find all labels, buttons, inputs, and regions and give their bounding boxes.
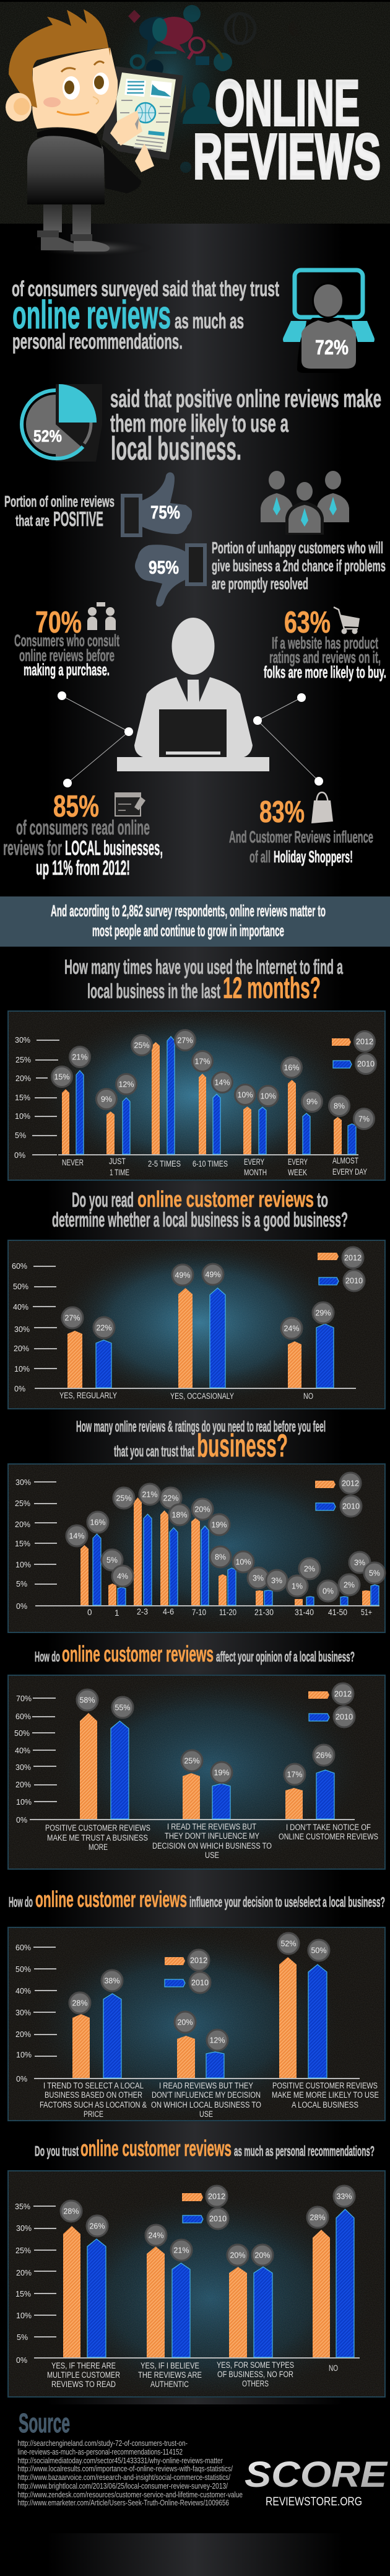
- bars 2010: [76, 1036, 356, 1154]
- logo: score: [245, 2455, 389, 2508]
- value bubbles: 9%: [101, 1095, 112, 1104]
- category labels: EVERY: [288, 1157, 308, 1167]
- axis: 10%: [16, 1798, 32, 1807]
- category labels: NEVER: [62, 1158, 84, 1167]
- category labels: USE: [205, 1851, 219, 1860]
- text: unhappy customers: are promptly resolved: [212, 574, 308, 593]
- category labels: BUSINESS BASED ON OTHER: [45, 2090, 142, 2100]
- axis: 10%: [15, 1112, 30, 1121]
- axis: 10%: [16, 2051, 32, 2059]
- value bubbles: 38%: [104, 1976, 120, 1985]
- axis: [15, 2202, 360, 2365]
- value bubbles: 29%: [315, 1308, 331, 1317]
- axis: 5%: [16, 1580, 27, 1588]
- legend: [308, 1683, 355, 1727]
- axis: 5%: [17, 2333, 28, 2342]
- value bubbles: 20%: [177, 2018, 193, 2027]
- category labels: 0: [87, 1608, 92, 1617]
- category labels: YES, REGULARLY: [59, 1391, 117, 1400]
- heading: chart 3: that you can trust that: [114, 1443, 194, 1460]
- value bubbles: 3%: [354, 1559, 365, 1567]
- axis: 15%: [15, 1540, 30, 1548]
- value bubbles: 8%: [215, 1553, 226, 1561]
- heading: chart 5: online customer reviews: [35, 1886, 187, 1912]
- value bubbles: 17%: [287, 1771, 303, 1779]
- heading: chart 2: Do you read: [72, 1188, 134, 1211]
- value bubbles: 5%: [369, 1569, 380, 1577]
- category labels: DON'T INFLUENCE MY DECISION: [152, 2090, 261, 2100]
- axis: 25%: [15, 2246, 31, 2255]
- header panel: [0, 0, 390, 224]
- value bubbles: 9%: [306, 1098, 318, 1106]
- legend: [315, 1473, 362, 1517]
- value bubbles: 16%: [90, 1518, 106, 1527]
- value bubbles: 18%: [171, 1510, 188, 1519]
- category labels: POSITIVE CUSTOMER REVIEWS: [45, 1823, 150, 1833]
- value bubbles: 50%: [311, 1947, 327, 1955]
- source list: http://www.localresults.com/importance-of-online-reviews-with-faqs-statistics/: [17, 2464, 233, 2473]
- category labels: A LOCAL BUSINESS: [292, 2100, 358, 2109]
- category labels: EVERY: [244, 1157, 264, 1167]
- value bubbles: [77, 1689, 334, 1785]
- value bubbles: 25%: [116, 1494, 132, 1503]
- title: [193, 68, 381, 192]
- category labels: NO: [303, 1391, 313, 1401]
- stat: 70%: online reviews before: [19, 646, 115, 665]
- axis: 0%: [16, 2075, 27, 2083]
- stat: 83%: of all: [249, 848, 271, 866]
- value bubbles: 27%: [64, 1313, 80, 1322]
- value bubbles: 27%: [177, 1036, 193, 1045]
- logo: score: REVIEWSTORE.ORG: [266, 2495, 362, 2508]
- text: positive reviews: [110, 385, 381, 467]
- axis: 0%: [14, 1151, 25, 1160]
- icon: thumbs down 95%: 95%: [149, 558, 179, 578]
- icon: review form: [115, 792, 145, 817]
- value bubbles: 1%: [292, 1582, 303, 1591]
- bars 2012: [72, 1957, 297, 2078]
- category labels: [62, 1156, 367, 1177]
- text: portion positive: POSITIVE: [53, 507, 103, 530]
- category labels: 4-6: [163, 1607, 174, 1616]
- panel: chart 5: [8, 1927, 385, 2125]
- legend: 2010: [342, 1502, 360, 1510]
- category labels: [87, 1607, 372, 1618]
- text: trust online reviews: as much as: [175, 309, 244, 333]
- source list: http://www.brightlocal.com/2013/06/25/local-consumer-review-survey-2013/: [17, 2482, 228, 2491]
- axis: 20%: [16, 2269, 32, 2277]
- value bubbles: 22%: [96, 1323, 112, 1332]
- stat: 85%: [3, 790, 163, 879]
- legend: [182, 2186, 228, 2229]
- axis: 35%: [15, 2202, 30, 2211]
- bars 2012: [80, 1713, 303, 1819]
- text: portion positive: Portion of online reviews: [4, 493, 115, 510]
- axis: 30%: [15, 1763, 31, 1772]
- axis: 10%: [14, 1365, 30, 1373]
- value bubbles: 19%: [214, 1768, 230, 1777]
- bars 2012: [80, 1497, 370, 1605]
- value bubbles: 49%: [175, 1271, 191, 1280]
- icon: person at monitor 72%: 72%: [315, 336, 349, 359]
- category labels: OF BUSINESS, NO FOR: [217, 2370, 293, 2379]
- legend: [165, 1950, 210, 1993]
- value bubbles: 16%: [284, 1063, 300, 1072]
- value bubbles: 20%: [230, 2251, 246, 2260]
- category labels: 1: [115, 1608, 119, 1618]
- axis: [14, 1694, 355, 1825]
- value bubbles: 33%: [336, 2192, 352, 2201]
- category labels: MORE: [89, 1842, 108, 1852]
- value bubbles: [69, 1933, 329, 2051]
- axis: 15%: [15, 1093, 30, 1102]
- value bubbles: 28%: [63, 2207, 79, 2215]
- category labels: 11-20: [219, 1608, 236, 1617]
- bars 2010: [96, 1288, 334, 1388]
- source list: [17, 2439, 243, 2507]
- stat: 85%: reviews for: [3, 836, 62, 859]
- heading: chart 2: online customer reviews: [137, 1186, 314, 1212]
- category labels: 41-50: [328, 1608, 347, 1617]
- text: portion positive: [4, 493, 115, 530]
- legend: 2010: [336, 1712, 353, 1721]
- category labels: REVIEWS TO READ: [51, 2380, 116, 2389]
- legend: 2010: [345, 1276, 363, 1285]
- icon: three customers: [261, 471, 349, 535]
- axis: 0%: [16, 2356, 27, 2365]
- legend: 2010: [357, 1059, 375, 1068]
- category labels: ON WHICH LOCAL BUSINESS TO: [151, 2100, 261, 2109]
- value bubbles: 12%: [209, 2036, 225, 2044]
- axis: 20%: [15, 1074, 31, 1083]
- category labels: YES, FOR SOME TYPES: [217, 2360, 294, 2370]
- value bubbles: 49%: [205, 1270, 221, 1279]
- axis: 0%: [14, 1385, 25, 1393]
- source list: http://socialmediatoday.com/sector45/1433331/why-online-reviews-matter: [17, 2456, 223, 2465]
- stat: 83%: 83%: [259, 795, 305, 829]
- icon: two people talking: [87, 602, 116, 630]
- source list: http://www.bazaarvoice.com/research-and-insight/social-commerce-statistics/: [17, 2473, 230, 2482]
- axis: [15, 1478, 379, 1611]
- value bubbles: 21%: [142, 1491, 158, 1499]
- category labels: ALMOST: [332, 1156, 358, 1165]
- legend: 2012: [208, 2192, 225, 2201]
- axis: 30%: [14, 1325, 30, 1334]
- heading: chart 2: to: [317, 1188, 328, 1211]
- category labels: 51+: [361, 1608, 372, 1617]
- value bubbles: 7%: [358, 1115, 370, 1124]
- category labels: 31-40: [295, 1608, 314, 1617]
- axis: 70%: [16, 1694, 32, 1703]
- axis: 0%: [16, 1816, 27, 1825]
- icon: pie 52%: 52%: [33, 427, 62, 445]
- axis: [14, 1036, 358, 1160]
- category labels: 2-3: [137, 1607, 148, 1616]
- social icon backdrop: [124, 5, 256, 173]
- category labels: AUTHENTIC: [150, 2380, 189, 2389]
- category labels: DECISION ON WHICH BUSINESS TO: [152, 1841, 272, 1851]
- value bubbles: 4%: [117, 1572, 128, 1581]
- stat: 70%: Consumers who consult: [14, 631, 119, 650]
- value bubbles: 55%: [115, 1704, 131, 1712]
- value bubbles: 26%: [89, 2222, 105, 2230]
- value bubbles: 24%: [148, 2232, 164, 2240]
- axis: 50%: [14, 1729, 30, 1738]
- value bubbles: 3%: [253, 1574, 264, 1582]
- value bubbles: 26%: [316, 1751, 332, 1759]
- heading: chart 2: [52, 1186, 348, 1231]
- category labels: I READ THE REVIEWS BUT: [167, 1822, 256, 1831]
- heading: chart 3: [76, 1418, 326, 1464]
- legend: 2010: [209, 2214, 227, 2223]
- value bubbles: 10%: [237, 1090, 253, 1099]
- legend: [318, 1247, 365, 1291]
- category labels: MULTIPLE CUSTOMER: [47, 2370, 120, 2380]
- text: trust online reviews: personal recommendations.: [12, 330, 183, 354]
- bars 2010: [87, 2209, 354, 2357]
- legend: 2012: [344, 1254, 362, 1263]
- icon: thumbs down 95%: [135, 545, 205, 607]
- legend: 2012: [190, 1956, 207, 1965]
- category labels: JUST: [109, 1157, 126, 1166]
- axis: 25%: [15, 1499, 30, 1508]
- value bubbles: [61, 2186, 355, 2266]
- category labels: YES, IF THERE ARE: [51, 2361, 116, 2370]
- stat: 83%: [229, 792, 373, 866]
- category labels: [40, 2081, 379, 2119]
- icon: shopping bag: [311, 792, 333, 823]
- category labels: WEEK: [288, 1168, 307, 1177]
- category labels: NO: [329, 2364, 338, 2373]
- axis: 50%: [15, 1965, 31, 1974]
- logo: score: SCORE: [245, 2455, 389, 2495]
- value bubbles: 14%: [214, 1078, 230, 1087]
- heading: chart 3: business?: [197, 1428, 288, 1464]
- category labels: MONTH: [244, 1168, 267, 1177]
- category labels: I READ REVIEWS BUT THEY: [159, 2081, 253, 2090]
- panel: chart 1: [8, 1005, 385, 1185]
- heading: chart 6: online customer reviews: [80, 2136, 232, 2161]
- value bubbles: 2%: [304, 1565, 315, 1574]
- panel: chart 3: [8, 1459, 385, 1632]
- icon: thumbs up 75%: 75%: [150, 502, 180, 523]
- heading: chart 1: [64, 955, 343, 1005]
- icon: pie 52%: [22, 384, 102, 462]
- axis: 25%: [15, 1056, 31, 1064]
- category labels: EVERY DAY: [332, 1167, 367, 1176]
- icon: person at laptop with connectors: [58, 618, 323, 787]
- icon: person at monitor 72%: [283, 270, 375, 373]
- stat: 70%: [14, 602, 119, 679]
- value bubbles: 15%: [54, 1073, 70, 1082]
- value bubbles: 14%: [69, 1531, 85, 1540]
- category labels: [47, 2360, 338, 2389]
- value bubbles: 3%: [271, 1576, 282, 1585]
- heading: chart 1: local business in the last: [87, 979, 220, 1002]
- text: trust online reviews: online reviews: [12, 292, 171, 337]
- value bubbles: 25%: [134, 1041, 150, 1049]
- heading: chart 5: How do: [9, 1894, 33, 1910]
- source list: http://searchengineland.com/study-72-of-consumers-trust-on-: [17, 2439, 188, 2448]
- category labels: THE REVIEWS ARE: [138, 2370, 202, 2380]
- value bubbles: 28%: [72, 1999, 88, 2007]
- value bubbles: [66, 1484, 385, 1601]
- value bubbles: [52, 1030, 374, 1129]
- axis: [12, 1262, 356, 1393]
- axis: 5%: [15, 1131, 26, 1140]
- stat: 85%: up 11% from 2012!: [36, 856, 130, 879]
- value bubbles: 52%: [280, 1939, 297, 1948]
- stat: 70%: making a purchase.: [24, 660, 110, 679]
- axis: 60%: [12, 1262, 27, 1271]
- legend: 2012: [342, 1479, 359, 1488]
- heading: chart 4: How do: [35, 1649, 60, 1665]
- text: unhappy customers: [212, 538, 386, 593]
- value bubbles: 10%: [260, 1092, 276, 1100]
- category labels: FACTORS SUCH AS LOCATION &: [40, 2100, 147, 2109]
- category labels: YES, IF I BELIEVE: [141, 2361, 199, 2370]
- illustration: man with tablet: [6, 9, 183, 256]
- axis: 50%: [13, 1282, 28, 1291]
- value bubbles: 20%: [254, 2251, 271, 2260]
- text: positive reviews: local business.: [111, 431, 241, 467]
- axis: 30%: [16, 2224, 32, 2233]
- axis: 30%: [15, 2009, 31, 2017]
- value bubbles: 2%: [344, 1581, 355, 1590]
- value bubbles: 22%: [163, 1494, 179, 1503]
- heading: source: Source: [19, 2408, 70, 2438]
- value bubbles: 25%: [184, 1757, 200, 1766]
- stat: 63%: 63%: [284, 606, 331, 639]
- banner: [0, 896, 390, 947]
- axis: 20%: [15, 1520, 30, 1529]
- category labels: I TREND TO SELECT A LOCAL: [43, 2081, 144, 2090]
- category labels: USE: [199, 2109, 213, 2119]
- value bubbles: [62, 1264, 334, 1339]
- legend: [332, 1031, 376, 1074]
- source list: http://www.emarketer.com/Article/Users-Seek-Truth-Online-Reviews/1009656: [17, 2499, 229, 2507]
- stat: 85%: LOCAL businesses,: [65, 836, 163, 859]
- axis: 60%: [15, 1943, 31, 1952]
- stat: 85%: of consumers read online: [16, 816, 150, 839]
- heading: chart 4: online customer reviews: [62, 1641, 214, 1667]
- category labels: YES, OCCASIONALY: [170, 1391, 234, 1401]
- bars 2010: [93, 1514, 379, 1605]
- icon: thumbs up 75%: [123, 472, 192, 535]
- category labels: 6-10 TIMES: [193, 1159, 228, 1168]
- heading: chart 1: 12 months?: [223, 972, 321, 1005]
- category labels: I DON'T TAKE NOTICE OF: [286, 1823, 371, 1832]
- category labels: [59, 1391, 313, 1401]
- source list: line-reviews-as-much-as-personal-recommendations-114152: [17, 2448, 183, 2456]
- stat: 85%: 85%: [53, 790, 99, 823]
- axis: 60%: [15, 1712, 31, 1721]
- legend: 2012: [356, 1037, 373, 1046]
- category labels: 7-10: [192, 1608, 206, 1617]
- category labels: 1 TIME: [110, 1168, 129, 1177]
- value bubbles: 5%: [106, 1556, 118, 1565]
- axis: 20%: [15, 1781, 31, 1789]
- value bubbles: 21%: [72, 1053, 88, 1062]
- value bubbles: 0%: [323, 1587, 334, 1596]
- axis: 20%: [14, 1344, 29, 1353]
- category labels: MAKE ME TRUST A BUSINESS: [47, 1833, 148, 1842]
- axis: 30%: [15, 1036, 30, 1045]
- bars 2012: [62, 1042, 342, 1154]
- category labels: 21-30: [254, 1608, 274, 1617]
- text: portion positive: that are: [15, 512, 50, 530]
- value bubbles: 19%: [211, 1520, 227, 1529]
- source list: http://www.zendesk.com/resources/customer-service-and-lifetime-customer-value: [17, 2491, 243, 2499]
- value bubbles: 12%: [118, 1080, 134, 1089]
- value bubbles: 8%: [334, 1102, 345, 1110]
- axis: 30%: [15, 1478, 31, 1487]
- axis: 10%: [15, 1561, 31, 1569]
- bars 2010: [111, 1721, 334, 1819]
- category labels: 2-5 TIMES: [148, 1159, 181, 1168]
- bars 2012: [67, 1288, 301, 1388]
- legend: 2010: [191, 1979, 209, 1987]
- value bubbles: 58%: [79, 1696, 95, 1705]
- axis: 40%: [15, 1746, 30, 1755]
- value bubbles: 20%: [194, 1505, 210, 1514]
- value bubbles: 28%: [310, 2213, 326, 2222]
- category labels: [45, 1822, 378, 1860]
- value bubbles: 24%: [284, 1325, 300, 1333]
- axis: [15, 1943, 360, 2083]
- axis: 40%: [13, 1303, 28, 1312]
- text: trust online reviews: [12, 277, 279, 354]
- value bubbles: 21%: [173, 2246, 189, 2255]
- heading: chart 6: Do you trust: [35, 2143, 79, 2159]
- value bubbles: 17%: [194, 1057, 210, 1066]
- axis: 40%: [15, 1987, 31, 1996]
- icon: shopping cart: [334, 607, 360, 634]
- legend: 2012: [334, 1690, 352, 1699]
- axis: 0%: [16, 1602, 27, 1611]
- stat: 70%: 70%: [35, 606, 82, 639]
- panel: chart 2: [8, 1236, 385, 1409]
- panel: chart 4: [8, 1670, 385, 1869]
- axis: 10%: [16, 2311, 32, 2320]
- panel: chart 6: [8, 2171, 385, 2410]
- category labels: PRICE: [84, 2109, 103, 2119]
- bars 2012: [63, 2226, 330, 2357]
- category labels: THEY DON'T INFLUENCE MY: [165, 1831, 259, 1841]
- category labels: OTHERS: [242, 2379, 269, 2388]
- axis: 15%: [15, 2290, 31, 2298]
- bars 2010: [103, 1965, 327, 2078]
- heading: chart 5: [9, 1886, 385, 1912]
- value bubbles: 10%: [235, 1557, 251, 1566]
- axis: 20%: [15, 2030, 31, 2039]
- stat: 63%: [264, 606, 386, 681]
